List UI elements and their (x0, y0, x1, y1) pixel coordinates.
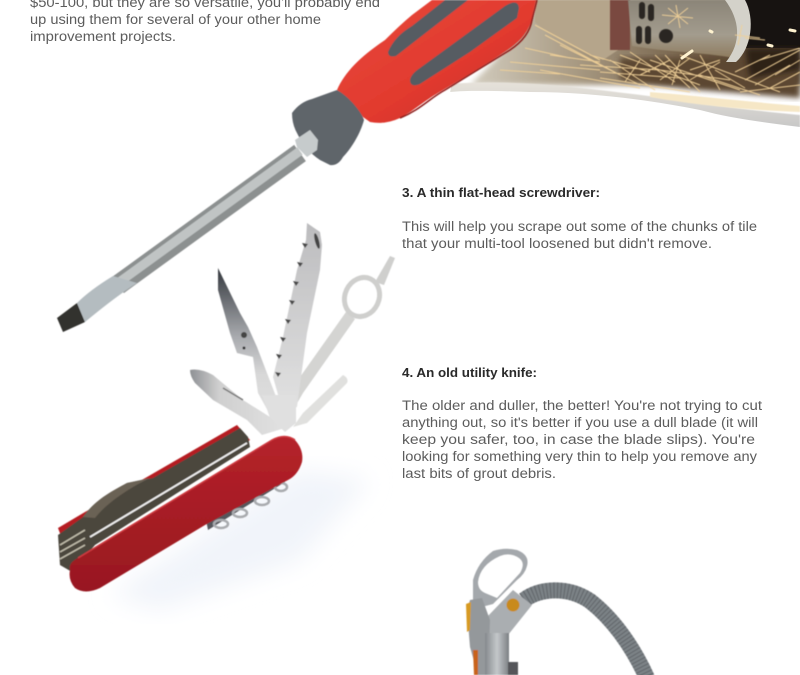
front red scale (70, 436, 302, 592)
photo: angle grinder with sparks (450, 0, 800, 130)
scissors (218, 268, 285, 420)
saw blade (273, 223, 322, 412)
screwdriver handle (337, 0, 536, 123)
text block: tool 3 description (402, 219, 757, 251)
folded tools (58, 428, 250, 572)
vacuum trim (466, 602, 471, 632)
corkscrew springs (205, 470, 287, 530)
text block: tool 4 description: The older and duller, the better! You're not trying to cut (402, 398, 762, 413)
knife shadow (110, 470, 370, 610)
knife blade (190, 370, 285, 435)
back red scale (58, 425, 250, 560)
vacuum neck (487, 590, 532, 635)
icon: flat-head screwdriver (57, 0, 537, 332)
heading: tool 4: 4. An old utility knife: (402, 365, 537, 380)
text block: tool 2 description: improvement projects. (30, 29, 176, 44)
text block: tool 2 description: up using them for several of your other home (30, 12, 321, 27)
handle grip inlays (388, 0, 468, 56)
vacuum handle loop (473, 549, 528, 608)
text block: tool 2 description (30, 0, 380, 44)
text block: tool 4 description: last bits of grout debris. (402, 466, 556, 481)
icon: vacuum hose and handle (466, 549, 647, 675)
screwdriver collar (292, 90, 364, 165)
heading: tool 3: 3. A thin flat-head screwdriver: (402, 185, 600, 200)
screwdriver hex nut (295, 130, 318, 157)
vacuum hose (524, 590, 647, 675)
band under the sparks (450, 82, 800, 130)
text block: tool 4 description: keep you safer, too, in case the blade slips). You're (402, 432, 755, 447)
screwdriver shaft (118, 151, 300, 285)
vacuum body (467, 598, 490, 675)
screwdriver tip (57, 303, 85, 332)
text block: tool 3 description: This will help you scrape out some of the chunks of tile (402, 219, 757, 234)
tool pivot (262, 395, 296, 432)
vacuum amber button (506, 598, 520, 612)
text block: tool 3 description: that your multi-tool loosened but didn't remove. (402, 236, 712, 251)
text block: tool 4 description: looking for something very thin to help you remove any (402, 449, 757, 464)
ring tool (296, 256, 395, 405)
icon: swiss army multi-tool (58, 223, 395, 610)
flat tool (293, 375, 348, 427)
text block: tool 4 description (402, 398, 762, 481)
text block: tool 4 description: anything out, so it's better if you use a dull blade (it will (402, 415, 758, 430)
screwdriver blade (77, 276, 137, 322)
